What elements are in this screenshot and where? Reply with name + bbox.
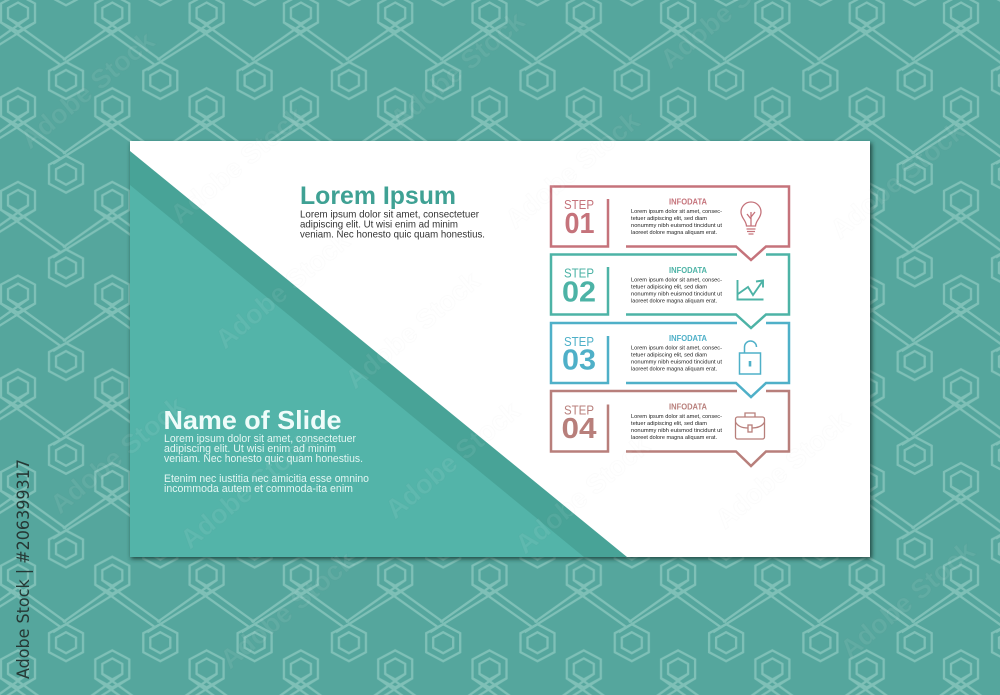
- step 04 outline: [551, 391, 789, 466]
- watermarks: Adobe Stock: [15, 25, 161, 155]
- watermarks: Adobe Stock: [215, 545, 361, 675]
- step 03 text: laoreet dolore magna aliquam erat.: [631, 366, 717, 372]
- slide card: [130, 141, 870, 557]
- step 02 label: STEP: [564, 266, 594, 280]
- step 01 text: laoreet dolore magna aliquam erat.: [631, 230, 717, 236]
- step 01 heading: INFODATA: [669, 198, 707, 206]
- step 04 text: nonummy nibh euismod tincidunt ut: [631, 428, 722, 434]
- intro text block: [300, 208, 485, 240]
- stock image id label: Adobe Stock | #206399317: [14, 459, 34, 679]
- step 03 text: Lorem ipsum dolor sit amet, consec-: [631, 345, 722, 351]
- step 02 text: Lorem ipsum dolor sit amet, consec-: [631, 277, 722, 283]
- step 03 number: 03: [562, 344, 596, 376]
- watermarks: Adobe Stock: [835, 535, 981, 665]
- slide card shadow: [131, 143, 872, 559]
- icon: open padlock: [740, 341, 760, 374]
- slide description text block: Etenim nec iustitia nec amicitia esse omnino: [164, 473, 369, 485]
- icon: growth chart: [738, 280, 764, 300]
- watermarks: Adobe Stock: [45, 390, 191, 520]
- icon: light bulb: [741, 202, 761, 234]
- watermarks: Adobe Stock: [340, 265, 486, 395]
- step 04 text: tetuer adipiscing elit, sed diam: [631, 421, 707, 427]
- step 02 text: [631, 277, 722, 304]
- step 04 number: 04: [562, 413, 596, 445]
- step 04 label: STEP: [564, 404, 594, 418]
- step 02 outline: [551, 254, 789, 328]
- watermarks: Adobe Stock: [510, 430, 656, 560]
- watermarks: Adobe Stock: [380, 395, 526, 525]
- slide description text block: Lorem ipsum dolor sit amet, consectetuer: [164, 433, 356, 445]
- step 02 number: 02: [562, 276, 596, 308]
- watermarks: Adobe Stock: [210, 225, 356, 355]
- step 01 label: STEP: [564, 198, 594, 212]
- step 03 text: [631, 345, 722, 372]
- step 02 heading: INFODATA: [669, 266, 707, 275]
- step 01 text: Lorem ipsum dolor sit amet, consec-: [631, 209, 722, 215]
- slide description text block: [164, 433, 369, 495]
- step 01 text: [631, 209, 722, 236]
- step 01 number: 01: [564, 208, 594, 240]
- slide description text block: adipiscing elit. Ut wisi enim ad minim: [164, 443, 336, 455]
- icon: briefcase: [736, 413, 764, 439]
- intro text block: Lorem ipsum dolor sit amet, consectetuer: [300, 208, 479, 220]
- step 04 heading: INFODATA: [669, 402, 707, 412]
- step 01 text: tetuer adipiscing elit, sed diam: [631, 216, 707, 222]
- intro text block: veniam. Nec honesto quic quam honestius.: [300, 228, 485, 240]
- watermarks: Adobe Stock: [165, 100, 311, 230]
- step 03 heading: INFODATA: [669, 334, 707, 343]
- slide description text block: incommoda autem et commoda-ita enim: [164, 483, 353, 495]
- watermarks: Adobe Stock: [500, 105, 646, 235]
- step 03 text: tetuer adipiscing elit, sed diam: [631, 352, 707, 358]
- step 01 text: nonummy nibh euismod tincidunt ut: [631, 223, 722, 229]
- step 02 text: nonummy nibh euismod tincidunt ut: [631, 291, 722, 297]
- dark teal diagonal band: [130, 151, 627, 557]
- panel: step 01: [551, 186, 789, 260]
- light teal triangle: [130, 185, 584, 557]
- watermarks: Adobe Stock: [385, 5, 531, 135]
- step 01 outline: [551, 186, 789, 260]
- heading: Lorem Ipsum: Lorem Ipsum: [300, 182, 456, 210]
- step 04 text: laoreet dolore magna aliquam erat.: [631, 435, 717, 441]
- watermarks: Adobe Stock: [710, 405, 856, 535]
- panel: step 03: [551, 323, 789, 397]
- slide description text block: veniam. Nec honesto quic quam honestius.: [164, 453, 363, 465]
- step 02 text: tetuer adipiscing elit, sed diam: [631, 284, 707, 290]
- watermarks: Adobe Stock: [175, 425, 321, 555]
- step 03 label: STEP: [564, 335, 594, 349]
- step 03 outline: [551, 323, 789, 397]
- watermarks: Adobe Stock: [825, 115, 971, 245]
- heading: Name of Slide: Name of Slide: [164, 405, 342, 435]
- step 04 text: [631, 414, 722, 441]
- intro text block: adipiscing elit. Ut wisi enim ad minim: [300, 218, 458, 230]
- step 04 text: Lorem ipsum dolor sit amet, consec-: [631, 414, 722, 420]
- step 02 text: laoreet dolore magna aliquam erat.: [631, 298, 717, 304]
- panel: step 02: [551, 254, 789, 328]
- step 03 text: nonummy nibh euismod tincidunt ut: [631, 359, 722, 365]
- panel: step 04: [551, 391, 789, 466]
